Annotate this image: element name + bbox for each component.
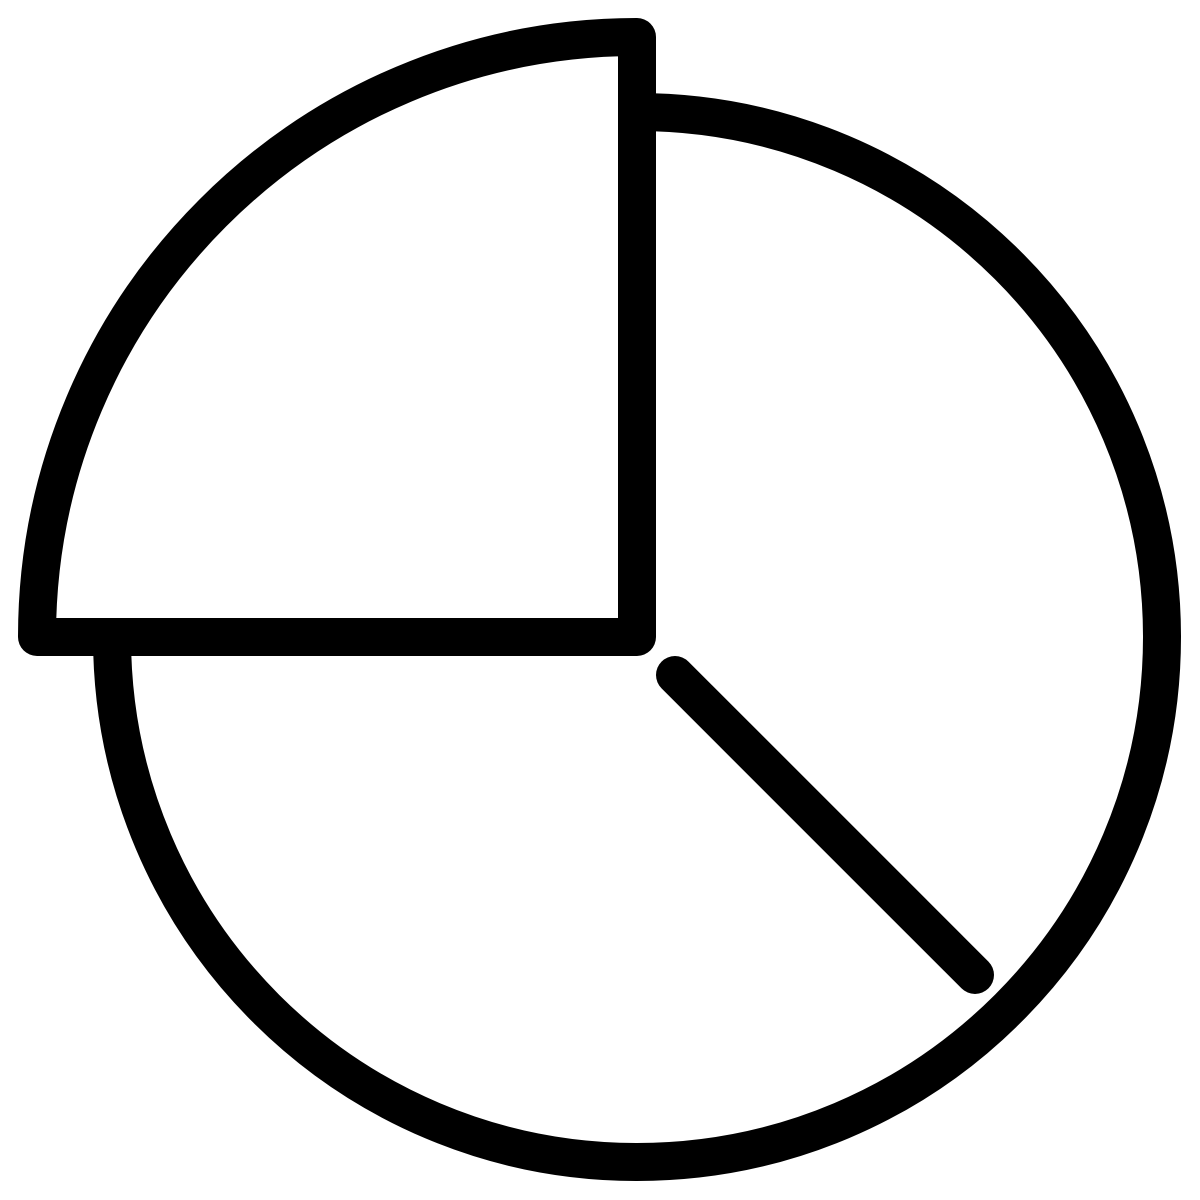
pie chart body arc <box>112 112 1162 1162</box>
detached quarter slice <box>37 37 637 637</box>
slice divider line <box>675 675 975 975</box>
